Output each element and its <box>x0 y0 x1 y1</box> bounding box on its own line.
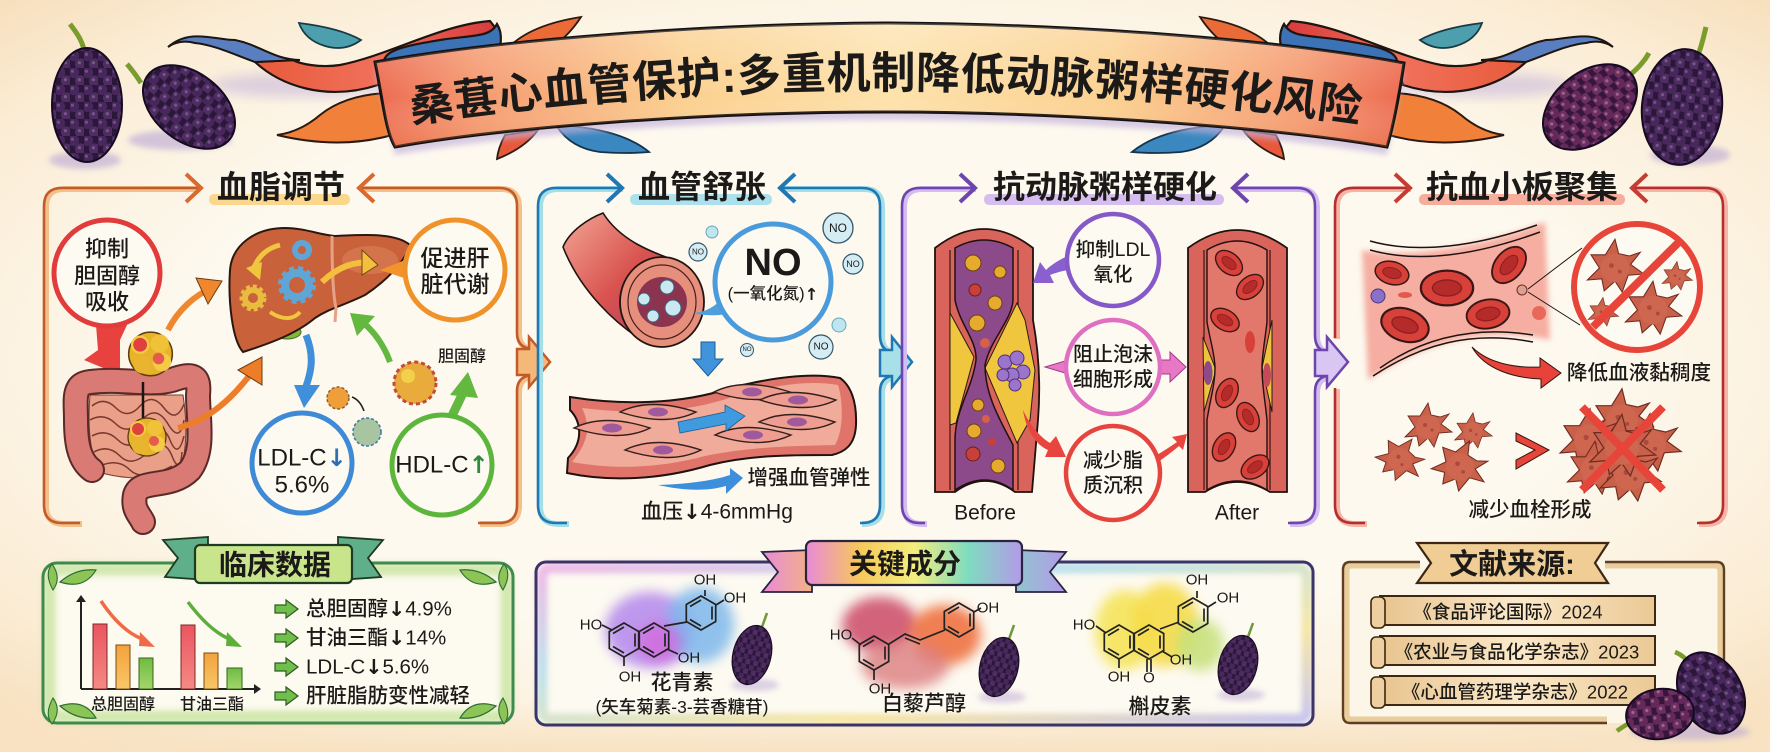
LDL-C circle: 5.6% <box>275 472 329 498</box>
panel: references <box>1343 543 1759 746</box>
quercetin molecule: 槲皮素 <box>1128 696 1192 718</box>
callout: stop foam cells: 细胞形成 <box>1073 368 1153 391</box>
NO molecules <box>689 213 863 359</box>
NO molecules: NO <box>814 342 829 352</box>
mulberries: top left <box>49 24 251 169</box>
blood vessel with cells <box>1362 222 1582 380</box>
ribbon tail and leaves: left <box>168 17 649 159</box>
mulberries: bottom right <box>1617 640 1759 746</box>
clinical results list: LDL-C↓5.6% <box>306 655 429 679</box>
resveratrol molecule: HO <box>830 626 852 644</box>
callout: inhibit absorption: 胆固醇 <box>74 264 140 288</box>
connector arrow <box>1315 337 1348 387</box>
callout: inhibit absorption <box>54 220 160 375</box>
resveratrol molecule <box>830 597 1026 716</box>
elasticity arrow and label: 增强血管弹性 <box>748 466 870 490</box>
anthocyanin molecule: 花青素 <box>650 672 714 694</box>
cholesterol label: 胆固醇 <box>438 348 486 366</box>
reference scrolls: 《心血管药理学杂志》2022 <box>1402 682 1628 702</box>
resveratrol molecule: OH <box>977 600 999 616</box>
panel: vasodilation <box>538 169 912 524</box>
clinical results list: 总胆固醇↓4.9% <box>306 597 452 621</box>
NO molecules: NO <box>692 248 704 256</box>
arrow to viscosity label <box>1472 347 1561 388</box>
prohibition sign with platelets <box>1574 224 1700 350</box>
anthocyanin molecule: OH <box>694 572 716 588</box>
NO bubble callout <box>693 224 831 340</box>
NO bubble callout: (一氧化氮)↑ <box>728 284 818 304</box>
liver illustration <box>230 228 410 352</box>
bar chart <box>76 595 261 714</box>
label: after: After <box>1215 502 1259 524</box>
anthocyanin molecule: (矢车菊素-3-芸香糖苷) <box>595 697 769 717</box>
heading: 抗动脉粥样硬化 <box>993 169 1217 205</box>
heading ribbon: 临床数据 <box>219 550 331 580</box>
panel: anti-atherosclerosis <box>902 169 1348 524</box>
panel: key ingredients <box>536 541 1313 725</box>
down arrow <box>693 342 723 376</box>
anthocyanin molecule: OH <box>619 668 641 686</box>
callout: inhibit LDL oxidation <box>1033 214 1159 306</box>
callout: reduce lipid deposits: 减少脂 <box>1083 449 1143 472</box>
heading ribbon <box>163 537 383 583</box>
elasticity arrow and label <box>658 466 870 494</box>
resveratrol molecule: OH <box>869 680 891 698</box>
quercetin molecule: OH <box>1170 652 1192 668</box>
panel: anti-platelet aggregation <box>1335 169 1725 524</box>
corner leaves <box>48 564 508 724</box>
LDL-C circle <box>252 413 352 513</box>
connector arrow <box>517 337 550 387</box>
heading banner: 文献来源: <box>1449 548 1575 581</box>
bar chart: 总胆固醇 <box>91 696 155 714</box>
LDL particles <box>327 362 436 446</box>
heading banner <box>1417 543 1608 583</box>
NO bubble callout: NO <box>744 242 802 284</box>
quercetin molecule: OH <box>1108 668 1130 686</box>
heading ribbon <box>762 541 1066 592</box>
reference scrolls: 《农业与食品化学杂志》2023 <box>1395 642 1639 662</box>
label: reduce thrombus: 减少血栓形成 <box>1468 498 1592 522</box>
heading: 血脂调节 <box>217 169 345 205</box>
greater-than symbol <box>1516 433 1549 469</box>
panel: blood lipid regulation <box>44 169 550 524</box>
callout: reduce lipid deposits: 质沉积 <box>1083 474 1143 497</box>
title text: 桑葚心血管保护:多重机制降低动脉粥样硬化风险 <box>412 51 1363 126</box>
heading: 抗血小板聚集 <box>1426 169 1618 205</box>
anthocyanin molecule: OH <box>724 590 746 606</box>
artery before <box>935 229 1039 492</box>
bar chart: 甘油三酯 <box>180 696 244 714</box>
NO molecules: NO <box>846 259 860 269</box>
intestine illustration <box>76 376 200 522</box>
connector arrow <box>880 337 912 387</box>
reference scrolls <box>1371 596 1655 708</box>
blood pressure label: 血压↓4-6mmHg <box>641 500 793 524</box>
callout: inhibit LDL oxidation: 抑制LDL <box>1076 239 1151 261</box>
anthocyanin molecule: HO <box>580 616 602 634</box>
anthocyanin molecule <box>580 572 779 717</box>
callout: stop foam cells <box>1045 320 1186 414</box>
arrows: to liver <box>168 278 478 428</box>
cholesterol clusters <box>128 332 172 456</box>
clinical results list: 肝脏脂肪变性减轻 <box>306 684 470 708</box>
gears and cycle arrows <box>241 243 378 318</box>
LDL-C circle: LDL-C↓ <box>257 444 347 472</box>
callout: promote liver metabolism: 促进肝 <box>420 245 490 271</box>
scattered platelets <box>1370 403 1495 498</box>
panel frame <box>1335 174 1725 524</box>
label: before: Before <box>954 502 1016 524</box>
quercetin molecule: OH <box>1186 572 1208 588</box>
ribbon tail and leaves: right <box>1132 17 1613 159</box>
callout: stop foam cells: 阻止泡沫 <box>1073 343 1153 366</box>
platelet clot crossed out <box>1560 389 1681 501</box>
quercetin molecule <box>1073 572 1265 718</box>
callout: promote liver metabolism: 脏代谢 <box>420 271 490 297</box>
NO molecules: NO <box>829 221 847 235</box>
panel frame <box>538 174 894 524</box>
quercetin molecule: O <box>1143 670 1155 686</box>
dilated vessel <box>567 376 856 478</box>
quercetin molecule: OH <box>1217 590 1239 606</box>
label: lower viscosity: 降低血液黏稠度 <box>1567 362 1711 384</box>
callout: inhibit absorption: 吸收 <box>85 290 129 314</box>
anthocyanin molecule: OH <box>678 650 700 666</box>
heading ribbon: 关键成分 <box>849 548 961 580</box>
clinical results list: 甘油三酯↓14% <box>306 626 446 650</box>
artery cross-section <box>563 213 704 347</box>
panel frame <box>902 174 1329 524</box>
callout: inhibit absorption: 抑制 <box>85 236 129 262</box>
panel frame <box>44 174 533 524</box>
panel: clinical data <box>43 537 513 724</box>
heading: 血管舒张 <box>638 169 766 205</box>
callout: promote liver metabolism <box>380 220 505 320</box>
mulberries: top right <box>1527 27 1730 169</box>
resveratrol molecule: 白藜芦醇 <box>882 692 966 716</box>
quercetin molecule: HO <box>1073 616 1095 634</box>
artery after <box>1188 230 1287 492</box>
clinical results list <box>275 597 470 708</box>
title banner <box>372 22 1406 157</box>
callout: reduce lipid deposits <box>1023 410 1187 520</box>
reference scrolls: 《食品评论国际》2024 <box>1413 602 1603 622</box>
HDL-C circle <box>392 415 492 515</box>
callout: inhibit LDL oxidation: 氧化 <box>1093 264 1133 286</box>
HDL-C circle: HDL-C↑ <box>395 451 489 479</box>
NO molecules: NO <box>742 347 752 353</box>
